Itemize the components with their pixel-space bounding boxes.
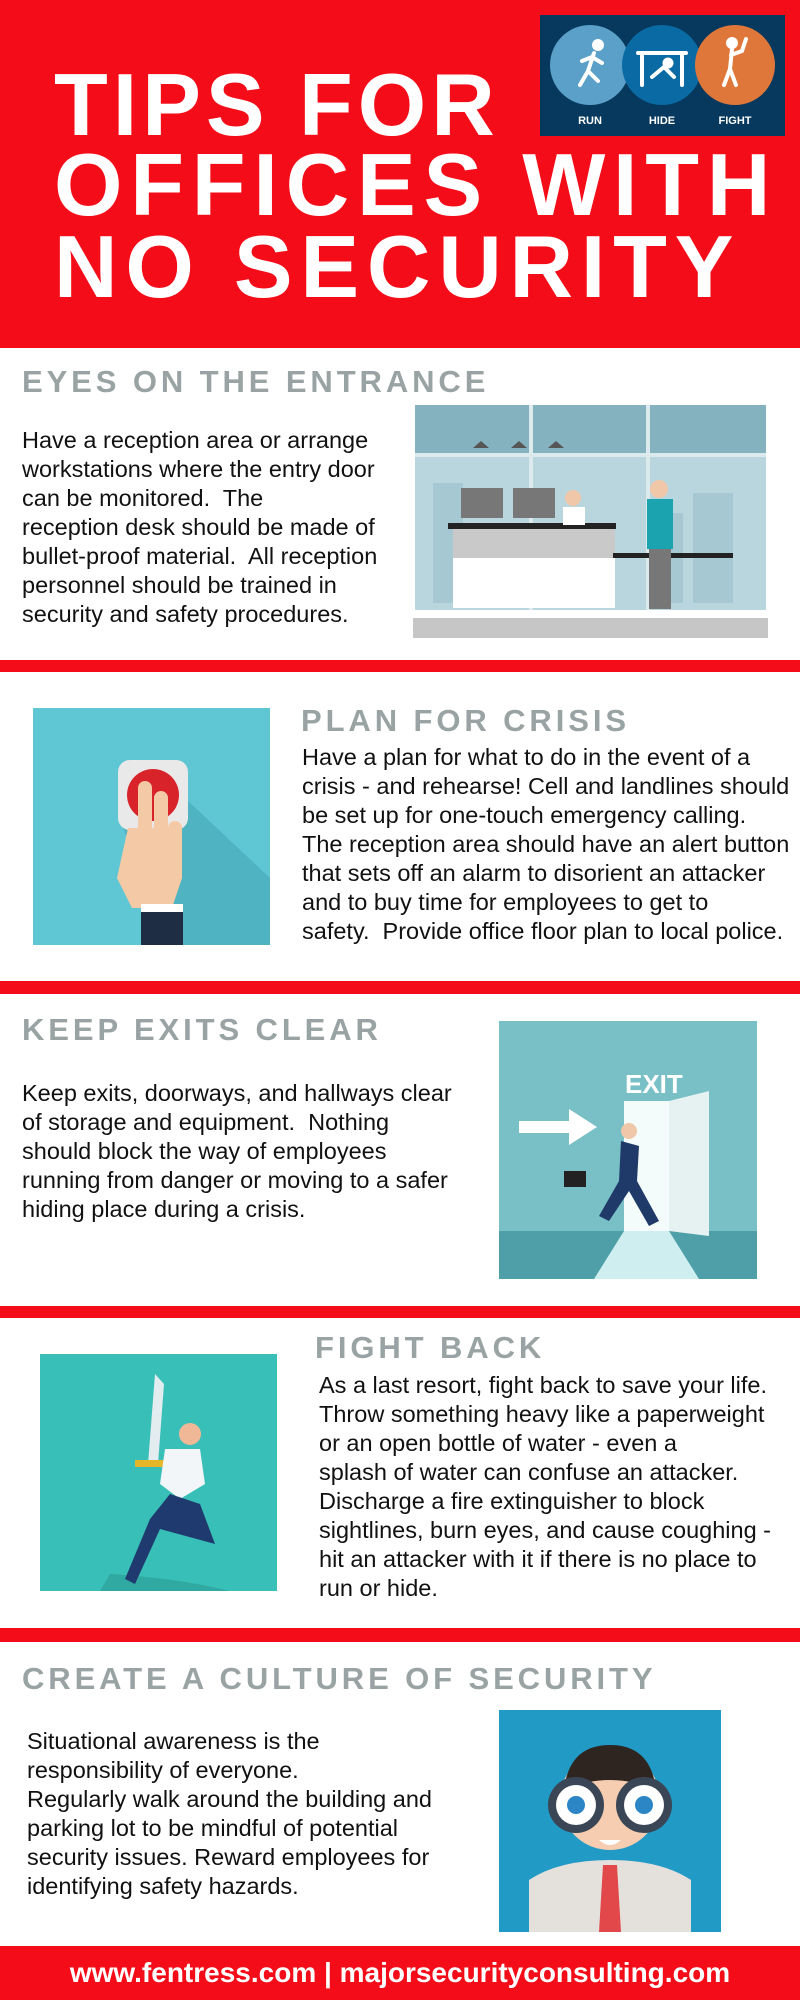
title xyxy=(54,55,778,316)
text: fight back: splash of water can confuse an attacker. xyxy=(319,1459,738,1485)
text: fight back: sightlines, burn eyes, and cause coughing - xyxy=(319,1517,771,1543)
text: plan xyxy=(302,744,789,944)
text: entrance xyxy=(22,427,377,627)
text: plan: and to buy time for employees to get to xyxy=(302,889,708,915)
heading: plan for crisis: PLAN FOR CRISIS xyxy=(301,703,630,738)
text: exits: hiding place during a crisis. xyxy=(22,1196,305,1222)
icon: run hide fight xyxy=(540,15,785,136)
text: exits: of storage and equipment. Nothing xyxy=(22,1109,389,1135)
text: entrance: can be monitored. The xyxy=(22,485,263,511)
text: entrance: bullet-proof material. All reception xyxy=(22,543,377,569)
text: fight back xyxy=(319,1372,771,1601)
title: TIPS FOR xyxy=(54,55,500,154)
text: plan: safety. Provide office floor plan to local police. xyxy=(302,918,783,944)
heading: fight back: FIGHT BACK xyxy=(315,1330,545,1365)
title: NO SECURITY xyxy=(54,217,741,316)
text: plan: Have a plan for what to do in the event of a xyxy=(302,744,750,770)
text: culture: responsibility of everyone. xyxy=(27,1757,299,1783)
divider xyxy=(0,1628,800,1642)
header band xyxy=(0,0,800,348)
text: culture: Regularly walk around the building and xyxy=(27,1786,432,1812)
divider xyxy=(0,660,800,672)
text: plan: crisis - and rehearse! Cell and landlines should xyxy=(302,773,789,799)
text: fight back: run or hide. xyxy=(319,1575,438,1601)
text: entrance: workstations where the entry door xyxy=(22,456,375,482)
image: exit door xyxy=(499,1021,757,1279)
text: fight back: Throw something heavy like a paperweight xyxy=(319,1401,764,1427)
text: fight back: As a last resort, fight back to save your life. xyxy=(319,1372,767,1398)
icon: run hide fight: FIGHT xyxy=(718,115,752,127)
text: fight back: hit an attacker with it if there is no place to xyxy=(319,1546,757,1572)
text: entrance: reception desk should be made of xyxy=(22,514,375,540)
heading: eyes on the entrance: EYES ON THE ENTRANCE xyxy=(22,364,489,399)
text: entrance: personnel should be trained in xyxy=(22,572,337,598)
text: culture: parking lot to be mindful of potential xyxy=(27,1815,398,1841)
image: binoculars xyxy=(499,1710,721,1932)
text: culture: identifying safety hazards. xyxy=(27,1873,299,1899)
divider xyxy=(0,981,800,994)
text: exits: running from danger or moving to a safer xyxy=(22,1167,448,1193)
text: plan: The reception area should have an alert button xyxy=(302,831,789,857)
text: plan: that sets off an alarm to disorient an attacker xyxy=(302,860,765,886)
image: reception xyxy=(413,405,768,638)
text: culture xyxy=(27,1728,432,1899)
image: fight back xyxy=(40,1354,277,1591)
title: OFFICES WITH xyxy=(54,135,778,234)
text: fight back: or an open bottle of water - even a xyxy=(319,1430,677,1456)
heading: culture of security: CREATE A CULTURE OF SECURITY xyxy=(22,1661,656,1696)
text: plan: be set up for one-touch emergency calling. xyxy=(302,802,746,828)
text: exits: should block the way of employees xyxy=(22,1138,386,1164)
text: entrance: security and safety procedures. xyxy=(22,601,349,627)
text: fight back: Discharge a fire extinguisher to block xyxy=(319,1488,704,1514)
text: exits: Keep exits, doorways, and hallways clear xyxy=(22,1080,452,1106)
icon: run hide fight: HIDE xyxy=(649,115,675,127)
image: alarm button xyxy=(33,708,270,945)
footer xyxy=(0,1946,800,2000)
text: culture: Situational awareness is the xyxy=(27,1728,320,1754)
heading: keep exits clear: KEEP EXITS CLEAR xyxy=(22,1012,382,1047)
icon: run hide fight: RUN xyxy=(578,115,602,127)
divider xyxy=(0,1306,800,1318)
image: exit door: EXIT xyxy=(625,1069,683,1099)
footer: www.fentress.com | majorsecurityconsulting.com xyxy=(70,1957,730,1988)
text: culture: security issues. Reward employees for xyxy=(27,1844,429,1870)
text: exits xyxy=(22,1080,452,1222)
text: entrance: Have a reception area or arrange xyxy=(22,427,368,453)
